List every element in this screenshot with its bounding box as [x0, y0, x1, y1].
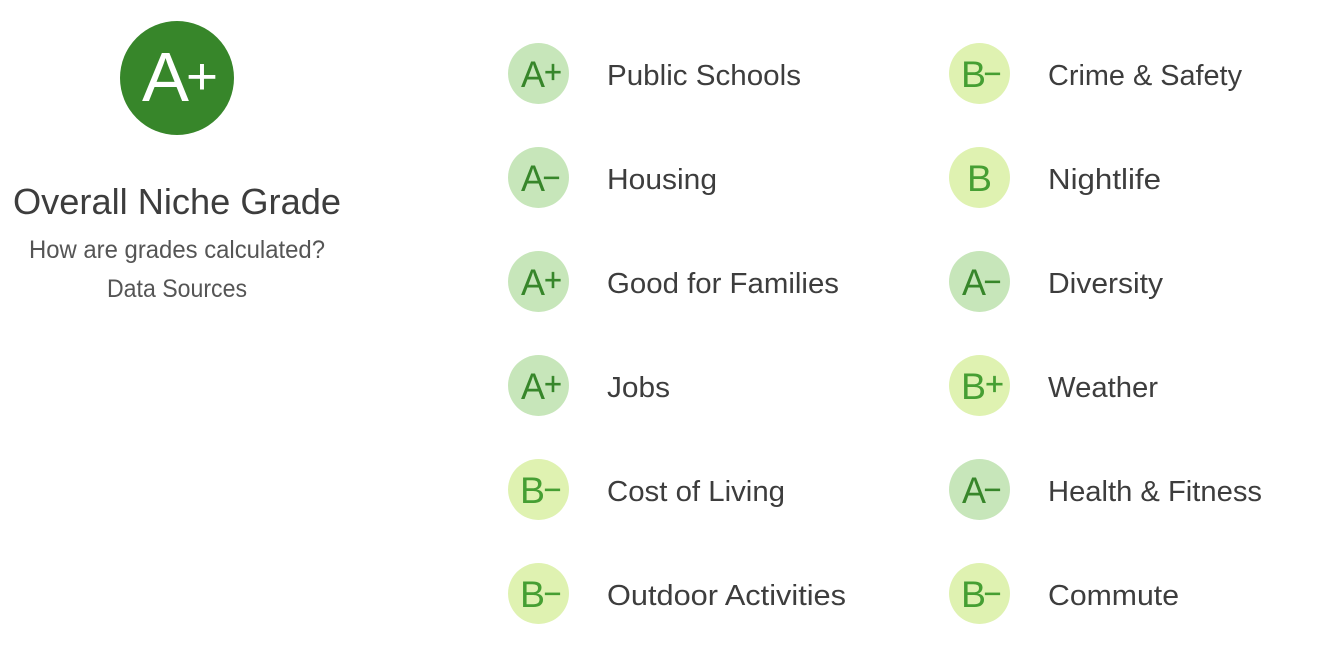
- row: Health & Fitness A-: A: [962, 470, 986, 511]
- panel: grades column two: [949, 43, 1262, 624]
- icon: overall grade badge A+: A: [142, 38, 189, 116]
- row: Public Schools A+: +: [544, 54, 562, 90]
- row: Outdoor Activities B-: B: [520, 574, 545, 615]
- row: Jobs A+: Jobs: [607, 372, 670, 404]
- row: Jobs A+: [508, 355, 670, 416]
- link: data sources: Data Sources: [107, 275, 247, 303]
- row: Diversity A-: –: [985, 261, 1000, 297]
- panel: grades column one: [508, 43, 846, 624]
- row: Public Schools A+: A: [521, 54, 545, 95]
- panel: overall grade: [13, 21, 341, 303]
- row: Commute B-: Commute: [1048, 580, 1179, 612]
- row: Cost of Living B-: –: [545, 469, 560, 505]
- row: Nightlife B: [949, 147, 1161, 208]
- row: Public Schools A+: Public Schools: [607, 60, 801, 92]
- row: Weather B+: Weather: [1048, 372, 1158, 404]
- row: Outdoor Activities B-: –: [545, 573, 560, 609]
- row: Outdoor Activities B-: Outdoor Activities: [607, 580, 846, 612]
- row: Commute B-: [949, 563, 1179, 624]
- row: Crime & Safety B-: [949, 43, 1242, 104]
- row: Good for Families A+: A: [521, 262, 545, 303]
- link: how grades are calculated: How are grades calculated?: [29, 236, 325, 264]
- heading: Overall Niche Grade: Overall Niche Grade: [13, 181, 341, 222]
- row: Jobs A+: +: [544, 366, 562, 402]
- row: Good for Families A+: Good for Families: [607, 268, 839, 300]
- row: Diversity A-: A: [962, 262, 986, 303]
- row: Housing A-: Housing: [607, 164, 717, 196]
- row: Nightlife B: Nightlife: [1048, 164, 1161, 196]
- row: Health & Fitness A-: Health & Fitness: [1048, 476, 1262, 508]
- row: Jobs A+: A: [521, 366, 545, 407]
- row: Commute B-: B: [961, 574, 986, 615]
- row: Diversity A-: [949, 251, 1164, 312]
- icon: overall grade badge A+: +: [186, 48, 218, 106]
- row: Public Schools A+: [508, 43, 801, 104]
- row: Housing A-: A: [521, 158, 545, 199]
- row: Commute B-: –: [985, 573, 1000, 609]
- row: Housing A-: [508, 147, 717, 208]
- row: Weather B+: [949, 355, 1158, 416]
- row: Good for Families A+: +: [544, 262, 562, 298]
- row: Good for Families A+: [508, 251, 839, 312]
- row: Crime & Safety B-: Crime & Safety: [1048, 60, 1242, 92]
- row: Diversity A-: Diversity: [1048, 268, 1164, 300]
- row: Housing A-: –: [544, 157, 559, 193]
- row: Weather B+: B: [961, 366, 986, 407]
- row: Nightlife B: B: [967, 158, 992, 199]
- row: Outdoor Activities B-: [508, 563, 846, 624]
- row: Health & Fitness A-: [949, 459, 1262, 520]
- row: Crime & Safety B-: –: [985, 53, 1000, 89]
- row: Weather B+: +: [985, 366, 1004, 402]
- icon: overall grade badge A+: [120, 21, 234, 135]
- row: Cost of Living B-: B: [520, 470, 545, 511]
- row: Health & Fitness A-: –: [985, 469, 1000, 505]
- row: Cost of Living B-: [508, 459, 785, 520]
- row: Crime & Safety B-: B: [961, 54, 986, 95]
- row: Cost of Living B-: Cost of Living: [607, 476, 785, 508]
